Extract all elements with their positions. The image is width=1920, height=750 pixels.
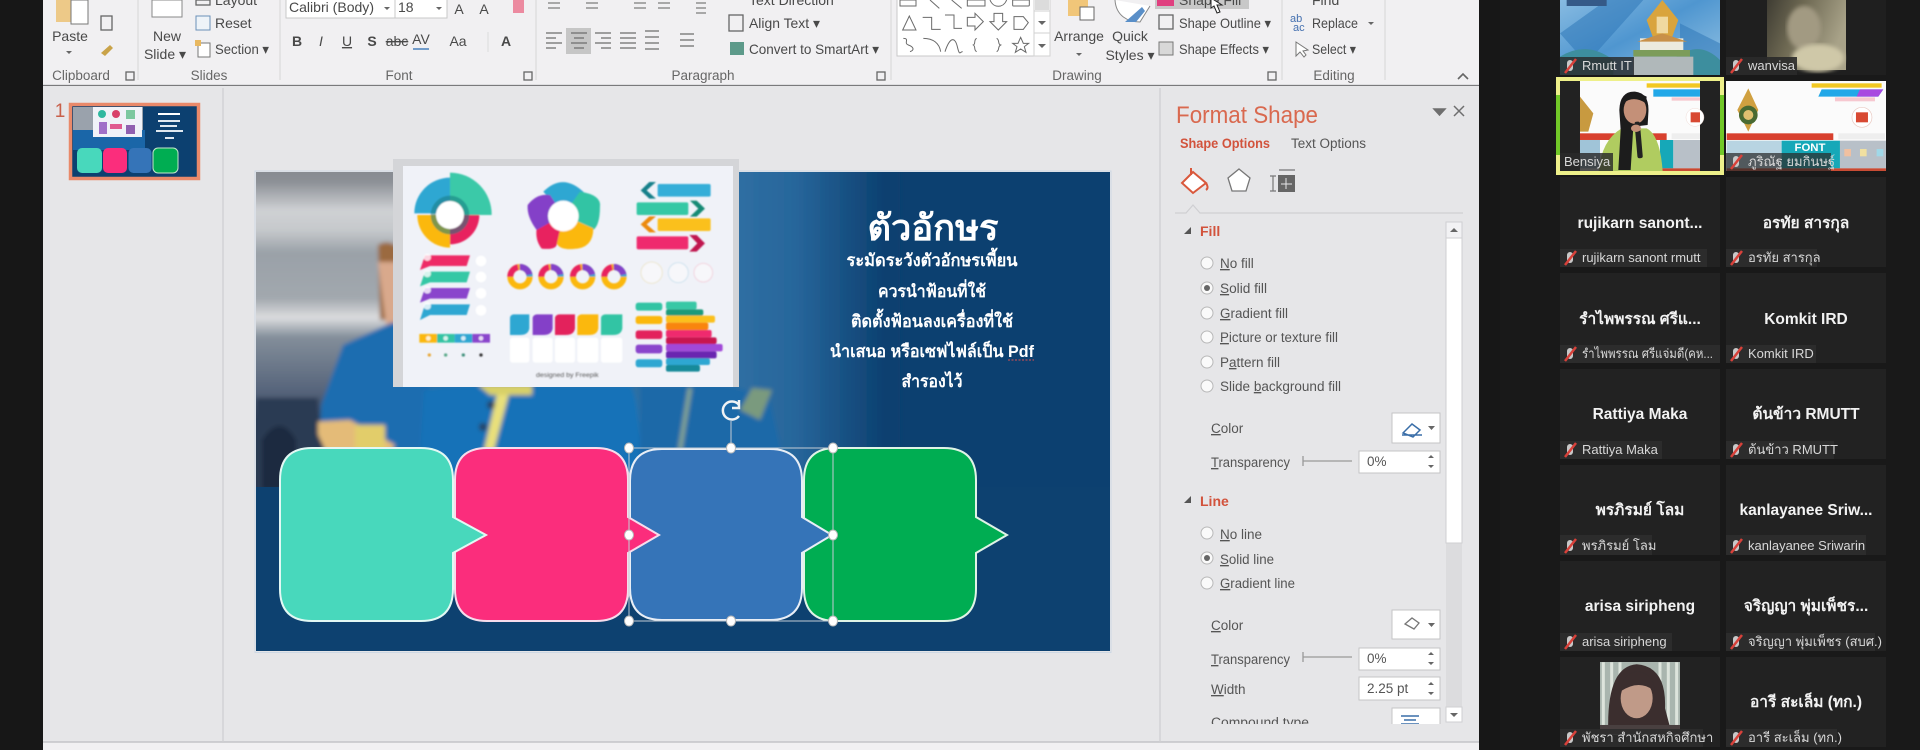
ribbon group: drawing: Drawing xyxy=(1052,68,1102,83)
tile: aree: อารี สะเล็ม (ทก.) xyxy=(1748,728,1842,745)
panel: participant gallery xyxy=(1556,0,1886,747)
line section: Line xyxy=(1200,493,1229,509)
icon: fill bucket xyxy=(1182,168,1208,193)
tile: pornpirom: พรภิรมย์ โลม xyxy=(1596,500,1684,519)
fill section: Picture or texture fill xyxy=(1220,330,1338,345)
pane tabs xyxy=(1180,138,1366,151)
tile: kanlayanee xyxy=(1726,465,1886,555)
ribbon group: font: Font xyxy=(385,68,413,83)
tile: rampaipan xyxy=(1560,273,1720,363)
icon: muted mic xyxy=(1565,539,1576,553)
ribbon group: drawing xyxy=(1052,0,1276,83)
icon: muted mic xyxy=(1731,59,1742,73)
icon: muted mic xyxy=(1731,731,1742,745)
fill section: Pattern fill xyxy=(1220,355,1280,370)
tile: Rattiya Maka: Rattiya Maka xyxy=(1582,442,1659,457)
ribbon group: shapes gallery xyxy=(897,0,1050,56)
fill section: Color xyxy=(1211,421,1244,436)
fill section xyxy=(1184,223,1440,473)
ribbon group: paragraph: Convert to SmartArt ▾ xyxy=(749,41,879,57)
tile: rujikarn sanont: rujikarn sanont rmutt xyxy=(1582,250,1701,265)
tile: Komkit IRD xyxy=(1726,273,1886,363)
tile: arisa siripheng xyxy=(1560,561,1720,651)
pane window controls xyxy=(1434,106,1464,116)
tile: presenter slide share: FONT xyxy=(1794,142,1826,154)
tile: arisa siripheng: arisa siripheng xyxy=(1582,634,1667,649)
slide body text: ติดตั้งฟ้อนลงเครื่องที่ใช้ xyxy=(851,308,1013,331)
icon: muted mic xyxy=(1731,347,1742,361)
background photo of flight attendants xyxy=(256,172,867,487)
tile: arisa siripheng: arisa siripheng xyxy=(1585,598,1695,615)
tile: orathai: อรทัย สารกุล xyxy=(1763,215,1849,233)
tile: patchara with video xyxy=(1560,657,1720,747)
ribbon group: clipboard: Clipboard xyxy=(52,68,110,83)
icon: muted mic xyxy=(1565,443,1576,457)
pane title: Format Shape xyxy=(1176,102,1318,129)
tile: rujikarn sanont xyxy=(1560,177,1720,267)
tile: rampaipan: รำไพพรรณ ศรีแจ่มดี(คห... xyxy=(1582,346,1713,361)
tile: presenter slide share xyxy=(1726,81,1886,171)
ribbon group: drawing: Shape Effects ▾ xyxy=(1179,41,1269,57)
fill section: Gradient fill xyxy=(1220,306,1288,321)
ribbon group: paragraph xyxy=(546,0,885,83)
timeline bar xyxy=(419,334,490,357)
tile: orathai: อรทัย สารกุล xyxy=(1748,250,1821,266)
panel: PowerPoint ribbon xyxy=(43,0,1479,86)
line section: 2.25 pt xyxy=(1367,681,1409,696)
pane tabs: Shape Options xyxy=(1180,135,1270,151)
ribbon group: paragraph: Paragraph xyxy=(671,68,735,83)
line section: Width xyxy=(1211,682,1246,697)
tile: kanlayanee: kanlayanee Sriwarin xyxy=(1748,538,1865,553)
icon: muted mic xyxy=(1731,635,1742,649)
ribbon group: editing xyxy=(1290,0,1468,83)
ribbon group: slides: Section ▾ xyxy=(215,41,269,57)
line section: Gradient line xyxy=(1220,576,1295,591)
tile: jarinya xyxy=(1726,561,1886,651)
tile: Bensiya (active speaker) xyxy=(1558,79,1722,173)
ribbon group: clipboard xyxy=(52,0,134,83)
line section: Solid line xyxy=(1220,552,1274,567)
ribbon group: font: abc xyxy=(386,33,408,49)
chart: five-petal diagram xyxy=(528,182,600,249)
fill section: Slide background fill xyxy=(1220,379,1341,394)
tile: pornpirom xyxy=(1560,465,1720,555)
icon: size and layout xyxy=(1270,170,1295,192)
tile: Rattiya Maka xyxy=(1560,369,1720,459)
fill section: Fill xyxy=(1200,223,1220,239)
slide body text: สำรองไว้ xyxy=(902,371,962,391)
tile: rujikarn sanont: rujikarn sanont... xyxy=(1578,215,1702,232)
tile: patchara with video: พัชรา สำนักสหกิจศึกษา xyxy=(1582,730,1713,745)
icon: muted mic xyxy=(1565,59,1576,73)
fill section: No fill xyxy=(1220,256,1254,271)
tile: jarinya: จริญญา พุ่มเพ็ชร (สบศ.) xyxy=(1748,632,1882,650)
ribbon group: editing: Editing xyxy=(1313,68,1355,83)
ribbon group: font: B xyxy=(292,33,302,49)
faint percentage circles xyxy=(641,262,713,283)
tile: rampaipan: รำไพพรรณ ศรีแ... xyxy=(1579,309,1701,328)
icon: muted mic xyxy=(1565,731,1576,745)
icon: muted mic xyxy=(1731,155,1742,169)
icon: muted mic xyxy=(1565,347,1576,361)
tile: wanvisa xyxy=(1726,0,1847,75)
shape: green speech block xyxy=(804,448,1007,621)
line section: Color xyxy=(1211,618,1244,633)
panel: slide thumbnail: 1 xyxy=(55,101,65,122)
tile: wanvisa: wanvisa xyxy=(1747,58,1796,73)
ribbon group: font: A xyxy=(479,1,489,17)
mouse cursor xyxy=(1211,0,1222,13)
tile: jarinya: จริญญา พุ่มเพ็ชร... xyxy=(1744,595,1868,616)
icon cards xyxy=(510,314,622,363)
chart: segmented donut xyxy=(414,173,492,248)
infographic picture placed on slide xyxy=(393,159,739,387)
icon: muted mic xyxy=(1565,635,1576,649)
line section: Compound type xyxy=(1211,715,1309,730)
ribbon group: font: S xyxy=(367,33,377,49)
freepik credit: designed by Freepik xyxy=(536,373,599,379)
panel: editing workspace background xyxy=(43,86,1479,750)
chart: ribbon list xyxy=(420,254,486,320)
ribbon group: drawing: Arrange xyxy=(1054,28,1104,44)
fill section: Solid fill xyxy=(1220,281,1267,296)
line section: No line xyxy=(1220,527,1262,542)
selection handles on blue block xyxy=(624,400,838,626)
ribbon group: editing: Replace xyxy=(1312,15,1358,31)
icon: muted mic xyxy=(1731,251,1742,265)
fill section: 0% xyxy=(1367,454,1387,469)
ribbon group: slides xyxy=(144,0,269,83)
shape: pink speech block xyxy=(455,448,659,621)
icon: muted mic xyxy=(1731,539,1742,553)
ribbon group: slides: Reset xyxy=(215,15,252,31)
tile: aree xyxy=(1726,657,1886,747)
tile: aree: อารี สะเล็ม (ทก.) xyxy=(1750,691,1862,711)
chart: arrow banners xyxy=(637,182,711,252)
tile: kanlayanee: kanlayanee Sriw... xyxy=(1740,502,1872,519)
line section: 0% xyxy=(1367,651,1387,666)
ribbon group: drawing: Quick xyxy=(1112,28,1149,44)
ribbon group: drawing: Styles ▾ xyxy=(1105,47,1155,63)
ribbon group: font xyxy=(286,0,532,83)
slide body text xyxy=(830,247,1034,391)
tile: Rattiya Maka: Rattiya Maka xyxy=(1593,406,1688,423)
ribbon group: editing: ab xyxy=(1290,13,1302,25)
ribbon group: editing: ac xyxy=(1293,22,1305,34)
tile: Rmutt IT xyxy=(1560,0,1720,75)
chart: numbered rings xyxy=(510,267,624,286)
icon: muted mic xyxy=(1565,251,1576,265)
pane scrollbar xyxy=(1446,222,1462,722)
tile: Komkit IRD: Komkit IRD xyxy=(1748,346,1814,361)
ribbon group: editing: Select ▾ xyxy=(1312,41,1356,57)
slide body text: ระมัดระวังตัวอักษรเพี้ยน xyxy=(846,247,1018,270)
tile: Rmutt IT: Rmutt IT xyxy=(1582,58,1632,73)
tile: tonkhao RMUTT: ต้นข้าว RMUTT xyxy=(1752,405,1860,423)
shape: teal speech block xyxy=(280,448,486,621)
line section: Transparency xyxy=(1211,652,1290,667)
fill section: Transparency xyxy=(1211,455,1290,470)
ribbon group: slides: Slide ▾ xyxy=(144,46,186,62)
ribbon group: font: I xyxy=(319,33,323,49)
ribbon group: font: AV xyxy=(412,31,430,47)
panel: slide thumbnail xyxy=(55,101,198,178)
slide heading: ตัวอักษร xyxy=(868,207,999,248)
line section xyxy=(1184,493,1440,732)
tile: orathai xyxy=(1726,177,1886,267)
ribbon group: clipboard: Paste xyxy=(52,28,88,44)
tile: Komkit IRD: Komkit IRD xyxy=(1764,311,1848,328)
panel: Format Shape pane xyxy=(1175,102,1464,732)
ribbon group: font: A xyxy=(501,33,511,49)
ribbon group: slides: New xyxy=(153,28,182,44)
slide body text: นำเสนอ หรือเซฟไฟล์เป็น Pdf xyxy=(830,339,1034,361)
slide xyxy=(240,165,1111,657)
ribbon group: font: U xyxy=(342,33,352,49)
ribbon group: drawing: Shape Outline ▾ xyxy=(1179,15,1271,31)
ribbon group: font: Aa xyxy=(449,33,467,49)
icon: rotate handle xyxy=(723,400,739,420)
ribbon group: paragraph: Align Text ▾ xyxy=(749,15,820,31)
tile: pornpirom: พรภิรมย์ โลม xyxy=(1582,538,1656,553)
ribbon group: font: A xyxy=(454,1,464,17)
ribbon group: slides: Slides xyxy=(191,68,228,83)
tile: Bensiya (active speaker): Bensiya xyxy=(1564,154,1611,169)
tile: presenter slide share: ภูริณัฐ ยมกินษฐ์ xyxy=(1748,154,1835,170)
tile: tonkhao RMUTT xyxy=(1726,369,1886,459)
tile: tonkhao RMUTT: ต้นข้าว RMUTT xyxy=(1748,442,1838,457)
stacked colour bars xyxy=(636,302,723,372)
pane tabs: Text Options xyxy=(1291,136,1366,151)
shape: blue speech block xyxy=(630,449,832,620)
slide body text: ควรนำฟ้อนที่ใช้ xyxy=(878,279,986,301)
icon: muted mic xyxy=(1731,443,1742,457)
icon: effects pentagon xyxy=(1228,169,1250,191)
